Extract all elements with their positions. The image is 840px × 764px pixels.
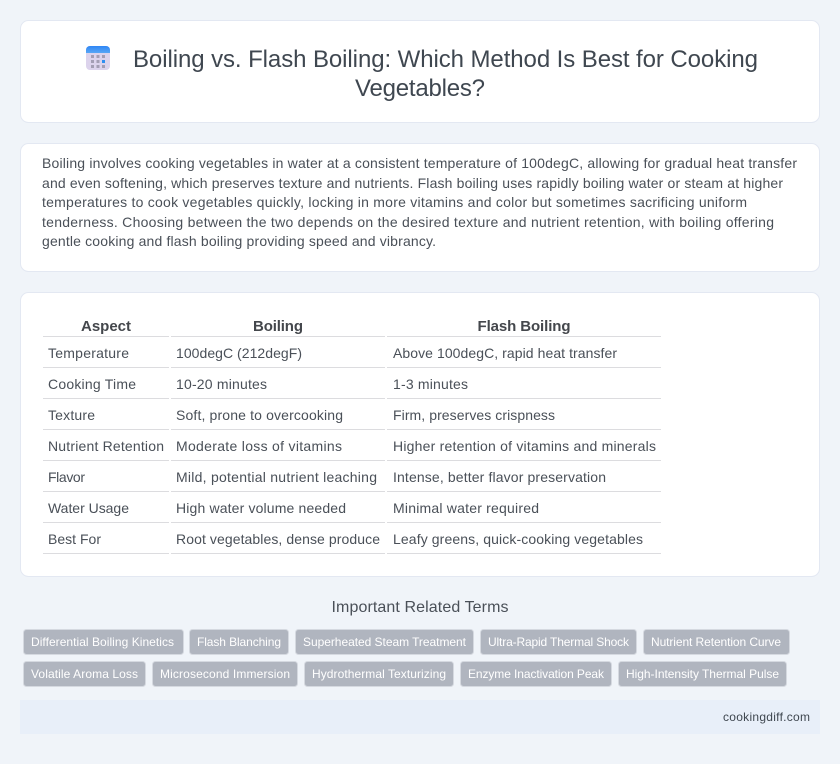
row: water usage [48, 500, 539, 516]
row: cooking time: Cooking Time [48, 376, 136, 392]
tags: related terms [24, 630, 790, 686]
heading: important related terms: Important Related Terms [332, 599, 508, 616]
row: flavor [48, 469, 606, 485]
tags: related terms: Differential Boiling Kinetics [31, 635, 174, 649]
text block: introduction paragraph: Boiling involves cooking vegetables in water at a consistent temperature of 100degC, allowing for gradual heat transfer [42, 155, 797, 171]
tags: related terms: Superheated Steam Treatment [303, 635, 467, 649]
tags: related terms: Hydrothermal Texturizing [312, 667, 446, 681]
tags: related terms: High-Intensity Thermal Pulse [626, 667, 779, 681]
row: nutrient retention [48, 438, 656, 454]
row: flavor: Flavor [48, 469, 85, 485]
row: cooking time: 10-20 minutes [176, 376, 267, 392]
row: cooking time: 1-3 minutes [393, 376, 468, 392]
text block: introduction paragraph: temperatures to cook vegetables quickly, locking in more vitamins and color but sometimes sacrificing uniform [42, 194, 747, 210]
title: Vegetables? [355, 75, 485, 102]
text block: introduction paragraph: tenderness. Choosing between the two depends on the desired texture and nutrient retention, with boiling offering [42, 214, 774, 230]
row: best for [48, 531, 643, 547]
row: texture: Texture [48, 407, 95, 423]
tags: related terms: Flash Blanching [197, 635, 281, 649]
row: best for: Root vegetables, dense produce [176, 531, 380, 547]
tags: related terms: Volatile Aroma Loss [31, 667, 138, 681]
table header: Aspect [81, 318, 131, 335]
row: nutrient retention: Higher retention of vitamins and minerals [393, 438, 656, 454]
icon: calendar [86, 46, 110, 70]
row: water usage: Minimal water required [393, 500, 539, 516]
row: nutrient retention: Nutrient Retention [48, 438, 164, 454]
row: flavor: Mild, potential nutrient leaching [176, 469, 377, 485]
row: water usage: Water Usage [48, 500, 129, 516]
row: temperature: Above 100degC, rapid heat transfer [393, 345, 617, 361]
title: Boiling vs. Flash Boiling: Which Method Is Best for Cooking [133, 46, 758, 73]
table header: Boiling [253, 318, 303, 335]
row: nutrient retention: Moderate loss of vitamins [176, 438, 342, 454]
tags: related terms: Enzyme Inactivation Peak [468, 667, 605, 681]
row: texture: Soft, prone to overcooking [176, 407, 343, 423]
table row lines [43, 336, 661, 554]
tags: related terms: Ultra-Rapid Thermal Shock [488, 635, 630, 649]
tags: related terms: Microsecond Immersion [160, 667, 290, 681]
text block: introduction paragraph: gentle cooking and flash boiling providing speed and vibrancy. [42, 233, 436, 249]
row: water usage: High water volume needed [176, 500, 346, 516]
table header [81, 318, 570, 335]
footer: cookingdiff.com [723, 710, 810, 724]
row: temperature [48, 345, 617, 361]
tags: related terms: Nutrient Retention Curve [651, 635, 781, 649]
row: cooking time [48, 376, 468, 392]
row: best for: Best For [48, 531, 101, 547]
row: temperature: Temperature [48, 345, 129, 361]
text block: introduction paragraph: and even softening, which preserves texture and nutrients. Flash boiling uses rapidly boiling water or steam at higher [42, 175, 783, 191]
panel: title card [20, 20, 820, 122]
row: best for: Leafy greens, quick-cooking vegetables [393, 531, 643, 547]
row: flavor: Intense, better flavor preservation [393, 469, 606, 485]
panel: introduction [20, 144, 820, 272]
title [133, 46, 758, 102]
row: temperature: 100degC (212degF) [176, 345, 302, 361]
table header: Flash Boiling [478, 318, 570, 335]
row: texture: Firm, preserves crispness [393, 407, 555, 423]
text block: introduction paragraph [42, 155, 797, 249]
panel: comparison table [20, 292, 820, 576]
row: texture [48, 407, 555, 423]
footer [20, 700, 820, 734]
